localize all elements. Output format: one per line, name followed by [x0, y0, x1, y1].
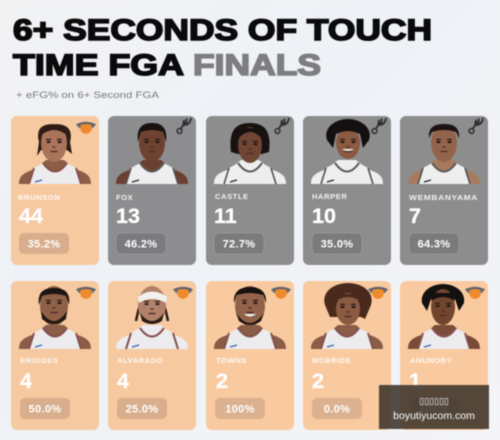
value: 10 — [312, 204, 336, 228]
eFG% pill: 100% — [419, 404, 449, 416]
portrait: Fox — [116, 123, 188, 184]
logo: Spurs — [275, 118, 289, 133]
portrait: Bridges — [19, 286, 91, 349]
eFG% pill: 46.2% — [125, 238, 157, 250]
eFG% pill: 100% — [225, 404, 255, 416]
panel: Fox — [108, 116, 196, 265]
eFG% pill: 72.7% — [223, 238, 255, 250]
value: 4 — [117, 369, 129, 393]
title: 6+ SECONDS OF TOUCH — [13, 14, 432, 47]
name: WEMBANYAMA — [409, 193, 478, 202]
value: 11 — [214, 204, 237, 228]
name: BRIDGES — [20, 356, 58, 365]
eFG% pill — [19, 233, 69, 254]
eFG% pill: 50.0% — [29, 404, 61, 416]
panel: Brunson — [11, 116, 99, 265]
eFG% pill: 0.0% — [324, 404, 350, 416]
logo: Knicks — [76, 287, 96, 299]
name: HARPER — [312, 192, 347, 201]
value: 1 — [409, 369, 421, 393]
logo: Spurs — [469, 118, 483, 133]
logo: Knicks — [76, 122, 96, 134]
eFG% pill: 35.2% — [28, 238, 60, 250]
value: 4 — [20, 369, 32, 393]
portrait: Harper — [311, 119, 383, 184]
logo: Knicks — [368, 287, 388, 299]
name: ALVARADO — [117, 356, 163, 365]
eFG% pill — [409, 398, 459, 419]
value: 2 — [216, 369, 228, 393]
title: FINALS — [193, 49, 321, 82]
portrait: Wembanyama — [408, 124, 480, 184]
eFG% pill — [312, 233, 362, 254]
portrait: McBride — [311, 283, 383, 349]
portrait: Alvarado — [116, 286, 188, 349]
eFG% pill — [214, 233, 264, 254]
panel: Towns — [206, 281, 294, 430]
eFG% pill — [312, 398, 362, 419]
name: CASTLE — [215, 192, 249, 201]
panel: Wembanyama — [400, 116, 488, 265]
value: 13 — [116, 204, 140, 228]
logo: Spurs — [372, 118, 386, 133]
panel: McBride — [303, 281, 391, 430]
eFG% pill — [215, 398, 265, 419]
title: TIME FGA — [13, 49, 184, 82]
logo: Spurs — [177, 118, 191, 133]
value: 44 — [19, 204, 43, 228]
portrait: Towns — [214, 286, 286, 349]
panel: Harper — [303, 116, 391, 265]
portrait: Castle — [214, 123, 286, 184]
value: 2 — [312, 369, 324, 393]
portrait: Brunson — [19, 124, 91, 184]
name: BRUNSON — [18, 193, 60, 202]
name: ANUNOBY — [410, 356, 452, 365]
eFG% pill: 25.0% — [126, 404, 158, 416]
title — [13, 14, 432, 82]
subtitle: + eFG% on 6+ Second FGA — [16, 90, 160, 101]
watermark: boyutiyucom.com — [393, 410, 475, 422]
eFG% pill: 35.0% — [321, 238, 353, 250]
eFG% pill — [116, 233, 166, 254]
eFG% pill: 64.3% — [418, 238, 450, 250]
eFG% pill — [20, 398, 70, 419]
panel: Alvarado — [108, 281, 196, 430]
panel: Anunoby — [400, 281, 488, 430]
watermark: ▯▯▯▯▯▯ — [419, 397, 449, 407]
logo: Knicks — [173, 287, 193, 299]
portrait: Anunoby — [408, 284, 480, 349]
eFG% pill — [409, 233, 459, 254]
panel: Castle — [206, 116, 294, 265]
eFG% pill — [117, 398, 167, 419]
name: MCBRIDE — [312, 356, 351, 365]
watermark — [379, 385, 489, 429]
name: TOWNS — [216, 356, 247, 365]
value: 7 — [409, 204, 421, 228]
logo: Knicks — [465, 287, 485, 299]
panel: Bridges — [11, 281, 99, 430]
logo: Knicks — [271, 287, 291, 299]
name: FOX — [116, 193, 133, 202]
